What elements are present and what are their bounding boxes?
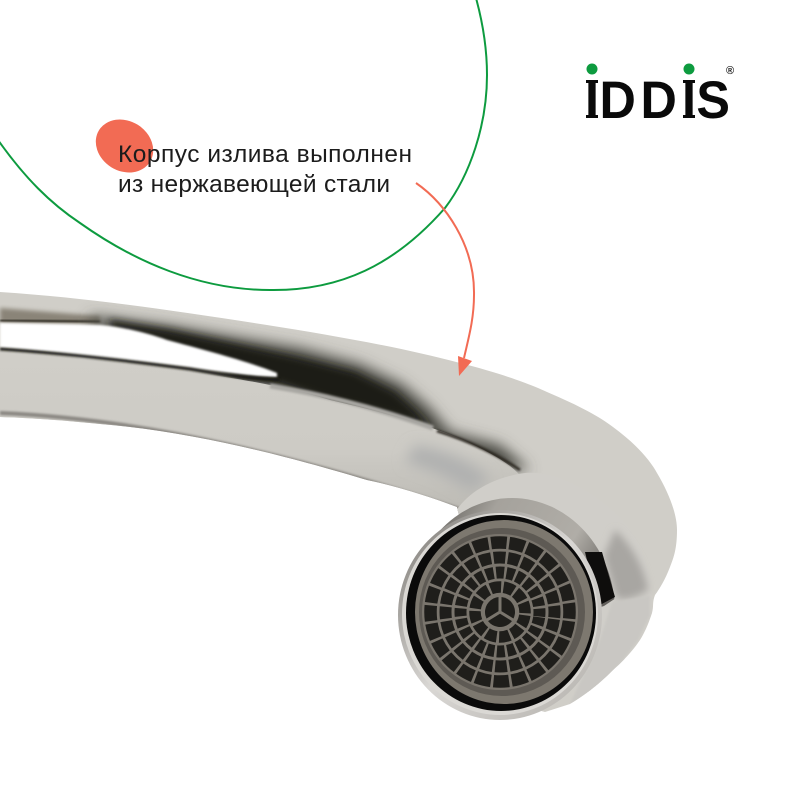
white highlight xyxy=(0,323,277,377)
chrome ring xyxy=(398,510,602,720)
logo: ® xyxy=(726,65,734,77)
aerator xyxy=(398,510,602,720)
caption: Корпус излива выполнен xyxy=(118,141,412,168)
nozzle body xyxy=(440,473,652,704)
green curve xyxy=(0,0,487,290)
soft dark halo xyxy=(90,316,530,470)
caption xyxy=(118,141,412,198)
caption: из нержавеющей стали xyxy=(118,171,390,198)
mesh housing xyxy=(415,520,593,704)
dark reflection band xyxy=(110,320,432,428)
black bevel block xyxy=(585,552,615,606)
black inner wall xyxy=(406,515,596,711)
lower tube body xyxy=(2,374,518,514)
faucet spout xyxy=(0,280,700,726)
mesh cells xyxy=(412,524,588,700)
nozzle bevel xyxy=(440,498,614,607)
mesh hub star xyxy=(487,597,513,620)
arrow xyxy=(416,183,474,376)
coral blob xyxy=(86,109,163,183)
spout tube xyxy=(0,280,700,720)
logo: IDDIS xyxy=(585,70,730,129)
